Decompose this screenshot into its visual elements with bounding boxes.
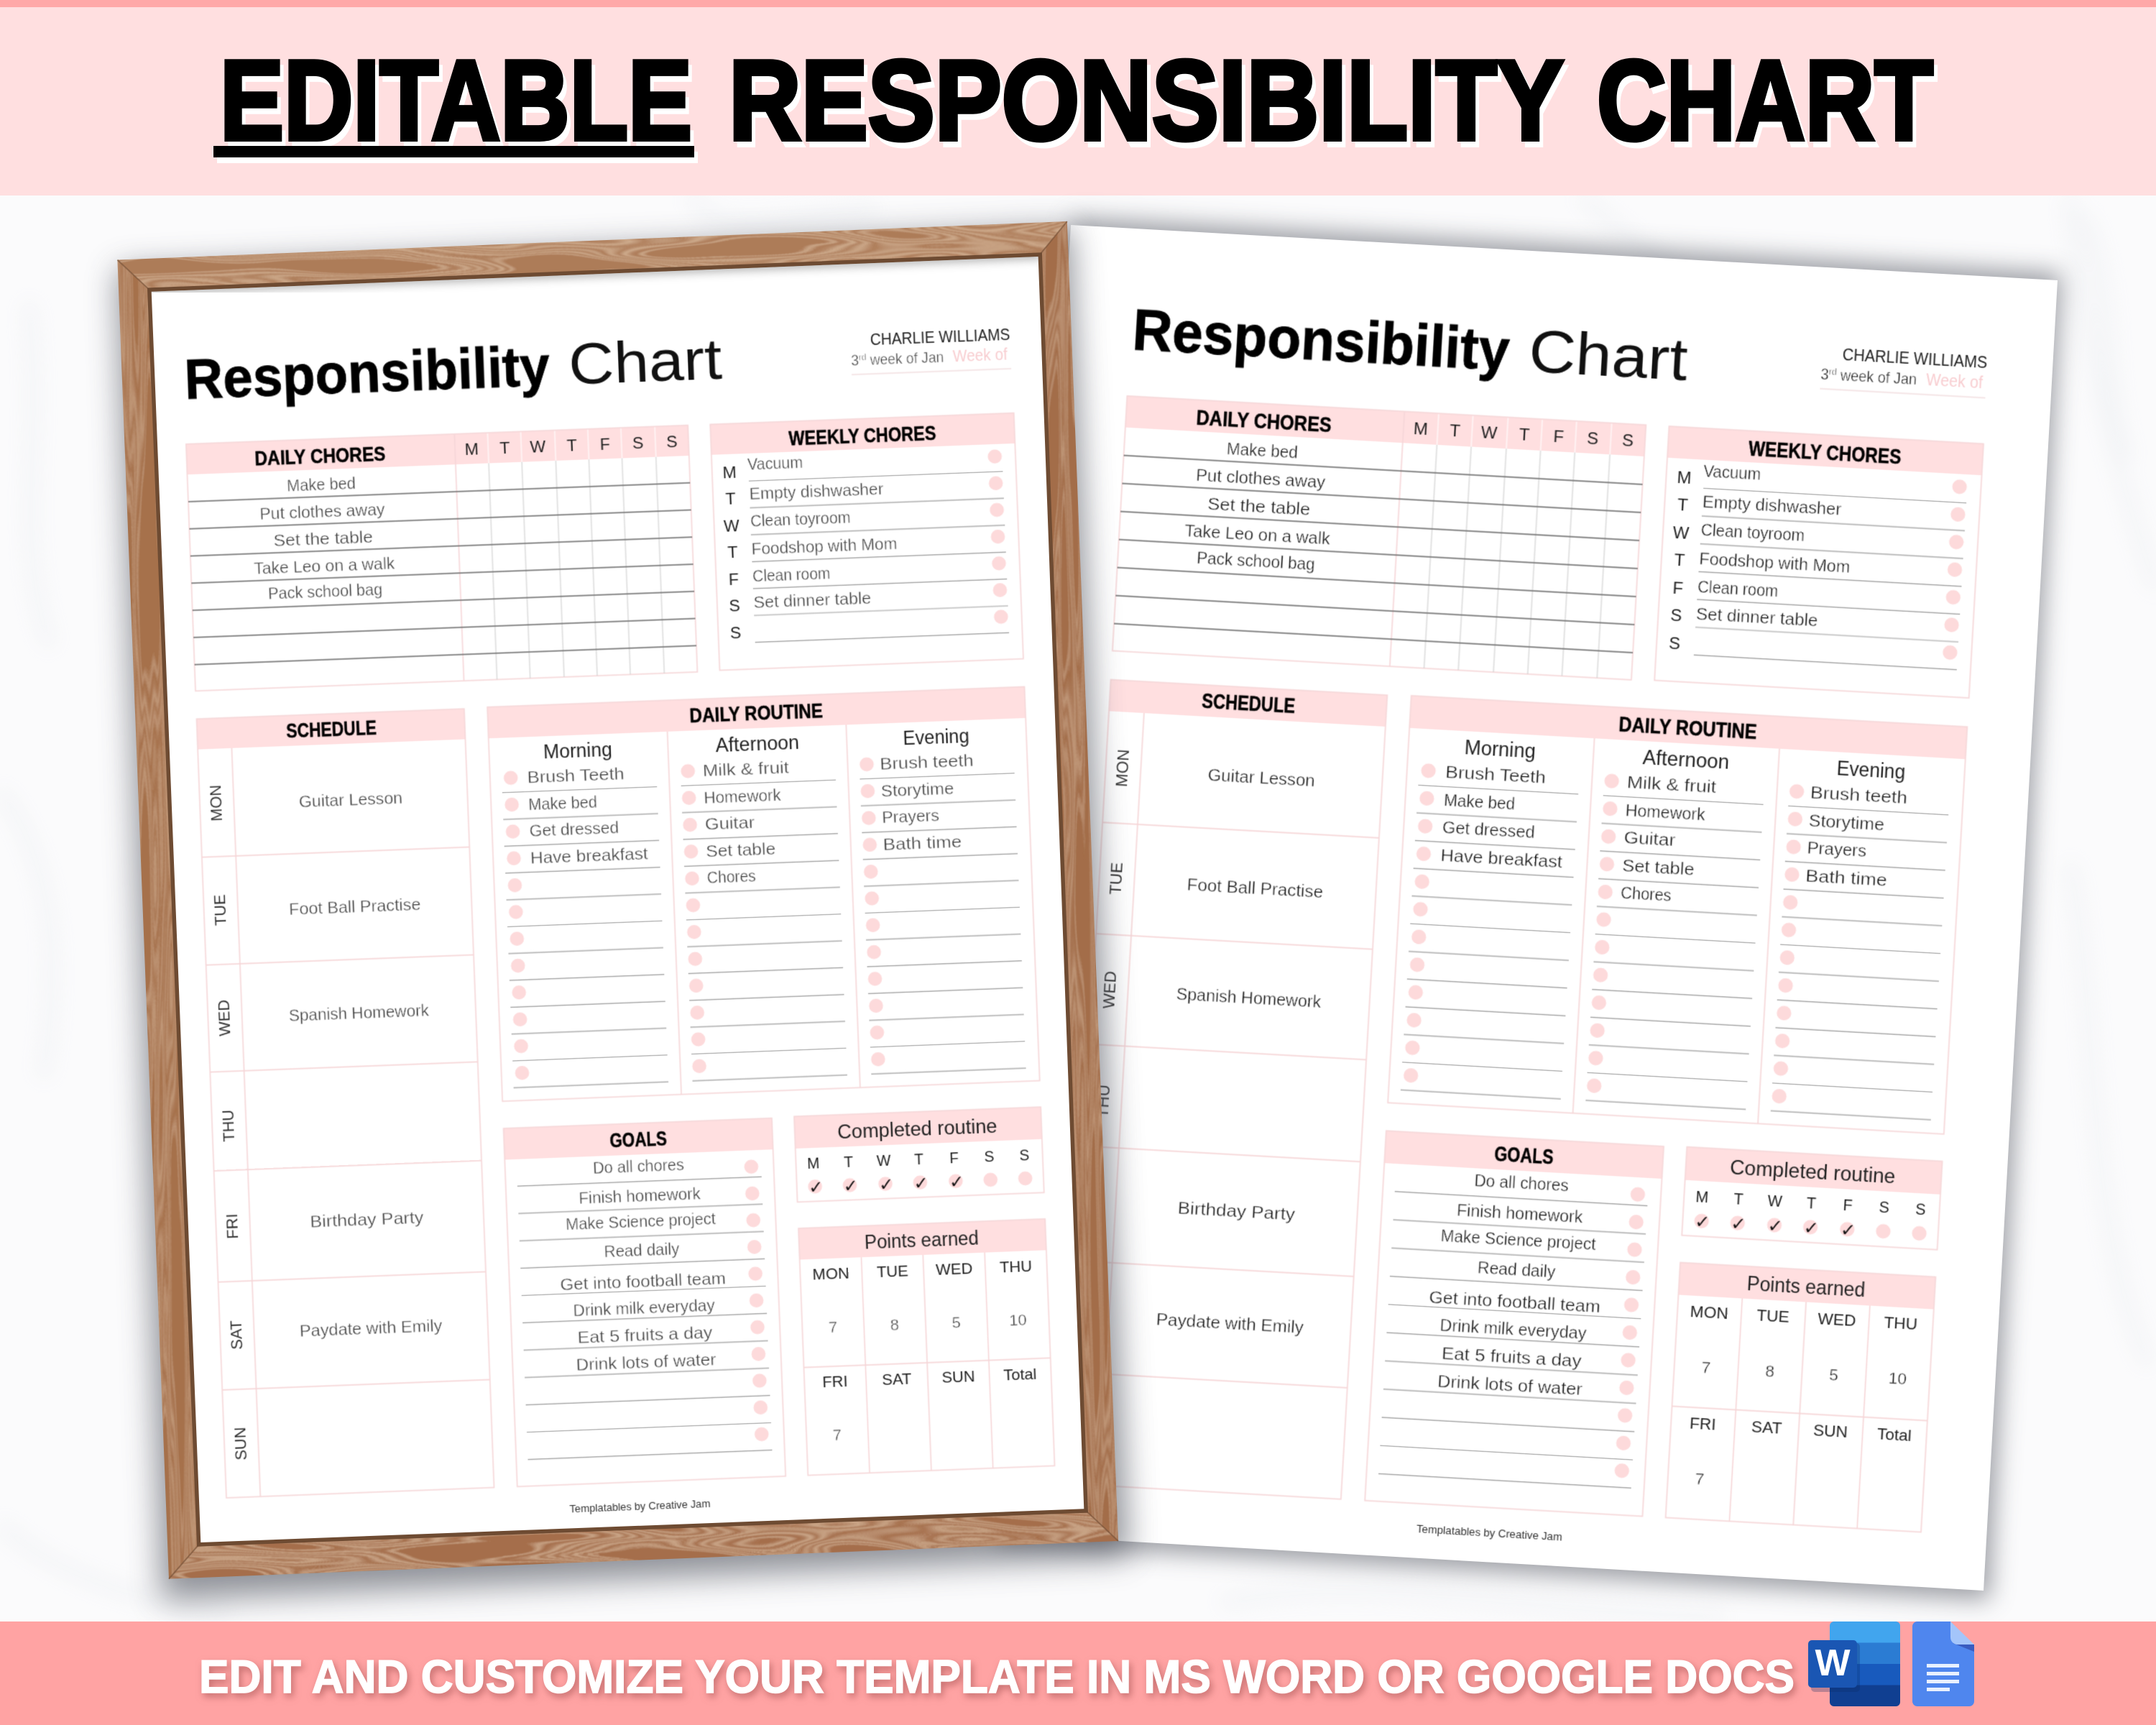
panel: schedule [197, 709, 494, 1498]
panel: goals [504, 1118, 786, 1486]
sheet title: Responsibility [183, 334, 551, 411]
completed routine day letters: S [1877, 1197, 1888, 1215]
panel: points earned [798, 1219, 1054, 1476]
weekly chores list: Vacuum [747, 453, 803, 474]
panel: daily chores [1112, 396, 1646, 680]
goals list: Get into football team [560, 1269, 726, 1294]
header band with title: CHART [1597, 37, 1933, 164]
weekly chores list: Vacuum [1702, 461, 1761, 484]
daily chores weekday headers: M [464, 440, 479, 459]
morning routine list: Brush Teeth [527, 765, 625, 788]
schedule day labels: TUE [1106, 862, 1126, 895]
evening routine list: Prayers [882, 806, 940, 828]
name and week: rd [1828, 366, 1836, 377]
completed routine day letters: F [1841, 1196, 1851, 1213]
panel: weekly chores [1654, 426, 1984, 698]
panel: schedule [1064, 680, 1387, 1499]
goals list: Finish homework [579, 1184, 701, 1208]
sheet title [183, 327, 723, 412]
afternoon routine list: Milk & fruit [703, 758, 790, 781]
afternoon routine list: Homework [704, 786, 782, 808]
daily chores list: Pack school bag [1196, 548, 1315, 574]
weekly chores list [1695, 461, 1856, 632]
schedule entries: Guitar Lesson [298, 788, 403, 811]
goals list: Eat 5 fruits a day [1440, 1343, 1581, 1370]
routine column headings: Evening [903, 725, 970, 750]
schedule day labels: WED [214, 999, 234, 1036]
completed routine check marks: ✓ [913, 1174, 929, 1194]
weekly day letters [722, 463, 744, 643]
panel: goals: GOALS [609, 1128, 668, 1151]
panel: schedule: SCHEDULE [1201, 690, 1296, 718]
schedule entries: Paydate with Emily [299, 1316, 443, 1340]
weekly chores list: Clean toyroom [750, 508, 852, 531]
schedule day labels: SAT [1081, 1301, 1100, 1332]
completed routine check marks: ✓ [949, 1172, 964, 1192]
name and week [1820, 343, 1988, 398]
afternoon routine list: Chores [707, 867, 757, 888]
schedule entries: Spanish Homework [1176, 983, 1322, 1011]
goals list: Eat 5 fruits a day [577, 1323, 714, 1348]
points earned day labels: MON [1688, 1302, 1728, 1322]
daily chores weekday headers: T [1449, 421, 1460, 441]
completed routine check marks: ✓ [879, 1174, 894, 1195]
evening routine list: Brush teeth [1809, 782, 1907, 807]
points earned values [1695, 1358, 1907, 1499]
name and week: 3 [1820, 366, 1830, 383]
afternoon routine list: Set table [1621, 855, 1694, 879]
weekly day letters: W [1672, 523, 1690, 543]
completed routine day letters: M [1694, 1187, 1708, 1205]
morning routine list: Get dressed [1441, 817, 1535, 842]
completed routine check marks: ✓ [1729, 1212, 1745, 1233]
points earned values: 10 [1009, 1311, 1028, 1330]
points earned day labels [812, 1257, 1037, 1392]
goals list: Do all chores [593, 1155, 684, 1178]
goals list: Drink milk everyday [573, 1296, 716, 1320]
routine column headings: Afternoon [715, 731, 800, 757]
evening routine list: Brush teeth [880, 752, 975, 774]
completed routine check marks: ✓ [1693, 1210, 1709, 1232]
panel: schedule: SCHEDULE [286, 717, 377, 742]
afternoon routine list [1620, 772, 1717, 908]
weekly day letters: T [725, 489, 737, 509]
name and week: week of Jan [1835, 367, 1916, 388]
points earned day labels: Total [1003, 1365, 1037, 1384]
daily chores weekday headers [464, 432, 678, 459]
icon: microsoft word: W [1815, 1642, 1851, 1684]
weekly day letters: F [729, 570, 740, 589]
afternoon routine list: Set table [706, 840, 776, 861]
panel: daily routine: DAILY ROUTINE [689, 700, 824, 727]
schedule day labels: SUN [1074, 1411, 1094, 1446]
points earned day labels: SAT [1749, 1417, 1781, 1436]
daily chores list: Set the table [273, 528, 374, 551]
schedule day labels: MON [206, 784, 226, 822]
points earned values [828, 1311, 1031, 1444]
completed routine day letters: S [1020, 1148, 1030, 1164]
sheet title: Chart [1526, 318, 1689, 393]
weekly day letters: F [1671, 578, 1683, 598]
schedule day labels: THU [1093, 1084, 1113, 1118]
evening routine list: Bath time [883, 832, 962, 855]
daily chores weekday headers: S [632, 433, 644, 453]
daily chores list [1182, 436, 1336, 575]
schedule entries [279, 788, 443, 1341]
name and week: CHARLIE WILLIAMS [1841, 344, 1986, 372]
daily chores weekday headers: T [1518, 425, 1529, 445]
weekly day letters [1666, 468, 1693, 654]
goals list: Drink milk everyday [1439, 1315, 1586, 1343]
weekly day letters: S [729, 597, 741, 616]
schedule entries [1156, 764, 1336, 1338]
evening routine list [1805, 783, 1908, 891]
footer call to action text: EDIT AND CUSTOMIZE YOUR TEMPLATE IN MS WORD OR GOOGLE DOCS [199, 1650, 1795, 1703]
goals list: Make Science project [566, 1209, 717, 1234]
schedule day labels: FRI [223, 1213, 241, 1238]
weekly day letters: S [730, 623, 742, 643]
panel: daily routine: DAILY ROUTINE [1618, 713, 1756, 743]
schedule entries: Paydate with Emily [1155, 1309, 1304, 1337]
points earned day labels [1683, 1302, 1918, 1445]
left sheet chart content [183, 325, 1056, 1515]
schedule day labels: SAT [226, 1320, 246, 1349]
daily chores weekday headers: S [666, 432, 678, 451]
daily chores list: Put clothes away [259, 500, 386, 524]
footer credit: Templatables by Creative Jam [1415, 1522, 1562, 1542]
weekly day letters: S [1667, 633, 1680, 653]
daily chores list: Make bed [287, 474, 356, 496]
daily chores weekday headers: S [1586, 428, 1598, 448]
daily chores weekday headers: S [1621, 431, 1634, 451]
panel: daily chores: DAILY CHORES [254, 443, 386, 470]
weekly chores list: Set dinner table [754, 589, 872, 612]
morning routine list: Get dressed [529, 819, 619, 841]
daily chores weekday headers: F [600, 435, 611, 454]
afternoon routine list: Guitar [705, 814, 755, 834]
schedule day labels: FRI [1087, 1191, 1107, 1218]
daily chores weekday headers: T [499, 438, 510, 457]
schedule day labels [206, 785, 250, 1460]
daily chores list: Set the table [1207, 494, 1311, 520]
points earned day labels: WED [936, 1260, 973, 1279]
weekly day letters: T [727, 543, 738, 562]
points earned day labels: TUE [877, 1262, 909, 1281]
completed routine day letters: T [1805, 1194, 1815, 1211]
daily chores list: Make bed [1226, 438, 1298, 463]
evening routine list: Bath time [1804, 865, 1886, 890]
footer credit: Templatables by Creative Jam [569, 1498, 711, 1515]
daily chores weekday headers: M [1413, 419, 1428, 439]
daily chores list: Pack school bag [268, 580, 383, 604]
evening routine list: Storytime [1807, 809, 1884, 834]
weekly day letters: S [1669, 606, 1682, 626]
weekly day letters: T [1676, 495, 1687, 515]
points earned values: 7 [1700, 1358, 1710, 1376]
panel: points earned: Points earned [1745, 1271, 1864, 1301]
header band with title: RESPONSIBILITY [729, 37, 1564, 164]
completed routine check marks [1694, 1211, 1856, 1241]
afternoon routine list [702, 758, 793, 888]
schedule entries: Birthday Party [1176, 1197, 1296, 1224]
schedule day labels: WED [1100, 970, 1120, 1009]
panel: completed routine [1682, 1147, 1943, 1250]
points earned day labels: THU [1881, 1312, 1916, 1332]
panel: goals: GOALS [1493, 1142, 1553, 1169]
sheet title: Chart [568, 327, 724, 397]
weekly day letters: W [724, 517, 740, 535]
morning routine list: Make bed [528, 792, 598, 814]
completed routine check marks: ✓ [1766, 1214, 1782, 1236]
completed routine day letters: T [1732, 1190, 1742, 1208]
header band with title: EDITABLE [220, 37, 692, 164]
points earned values: 10 [1886, 1368, 1905, 1386]
panel: weekly chores: WEEKLY CHORES [1747, 437, 1901, 469]
points earned day labels: FRI [1688, 1413, 1715, 1432]
points earned day labels: THU [1000, 1258, 1033, 1276]
schedule day labels: MON [1112, 749, 1133, 787]
daily chores list [250, 472, 397, 604]
daily chores weekday headers: T [566, 436, 577, 455]
panel: daily routine [1388, 696, 1967, 1134]
routine column headings [543, 724, 969, 763]
daily chores list: Take Leo on a walk [1184, 520, 1331, 548]
weekly chores list: Empty dishwasher [1701, 492, 1841, 519]
icon: google docs [1912, 1622, 1974, 1706]
schedule day labels: THU [218, 1109, 238, 1142]
afternoon routine list: Chores [1619, 883, 1671, 906]
morning routine list [527, 763, 648, 868]
points earned day labels: MON [812, 1264, 849, 1284]
routine column headings: Evening [1835, 757, 1904, 783]
morning routine list: Have breakfast [530, 845, 649, 868]
goals list: Read daily [604, 1239, 681, 1261]
panel: points earned [1666, 1263, 1935, 1532]
goals list: Finish homework [1455, 1200, 1583, 1226]
schedule day labels: SUN [231, 1426, 250, 1460]
panel: completed routine: Completed routine [837, 1116, 998, 1144]
weekly chores list: Clean room [752, 564, 831, 586]
points earned day labels: TUE [1755, 1305, 1788, 1325]
points earned values: 7 [1693, 1468, 1703, 1487]
schedule day labels: TUE [211, 894, 229, 926]
routine column headings [1464, 736, 1906, 784]
goals list: Get into football team [1428, 1287, 1600, 1316]
completed routine check marks [808, 1172, 964, 1197]
completed routine check marks: ✓ [843, 1176, 859, 1197]
points earned values: 5 [952, 1314, 962, 1332]
points earned values: 7 [829, 1318, 838, 1336]
panel: points earned: Points earned [865, 1227, 980, 1254]
completed routine day letters [1695, 1188, 1926, 1218]
evening routine list: Prayers [1805, 837, 1866, 860]
completed routine day letters: T [914, 1151, 924, 1169]
schedule entries: Spanish Homework [288, 1000, 430, 1025]
morning routine list: Brush Teeth [1445, 762, 1546, 787]
goals list: Do all chores [1473, 1169, 1568, 1195]
weekly chores list: Foodshop with Mom [752, 535, 898, 559]
sheet title [1131, 295, 1690, 393]
morning routine list: Make bed [1443, 789, 1515, 814]
daily chores weekday headers: F [1552, 427, 1564, 446]
panel: daily chores: DAILY CHORES [1196, 407, 1332, 437]
routine column headings: Morning [1463, 736, 1536, 763]
weekly chores list: Foodshop with Mom [1698, 548, 1850, 576]
completed routine check marks: ✓ [808, 1177, 824, 1198]
afternoon routine list: Homework [1624, 799, 1705, 824]
completed routine day letters: T [844, 1154, 854, 1171]
panel: completed routine: Completed routine [1728, 1155, 1894, 1187]
name and week: Week of [954, 345, 1009, 366]
points earned day labels: SUN [1811, 1420, 1846, 1440]
daily chores weekday headers: W [1480, 423, 1498, 443]
afternoon routine list: Guitar [1623, 827, 1675, 850]
schedule entries: Guitar Lesson [1207, 765, 1315, 791]
daily chores weekday headers [1413, 419, 1634, 451]
name and week: 3 [851, 352, 860, 369]
right sheet chart content [1074, 298, 1988, 1542]
points earned day labels: SAT [882, 1370, 912, 1389]
panel: goals [1365, 1131, 1664, 1517]
completed routine day letters: W [1766, 1192, 1782, 1210]
weekly day letters: M [1676, 468, 1691, 488]
schedule entries: Foot Ball Practise [288, 895, 421, 919]
panel: weekly chores: WEEKLY CHORES [789, 423, 937, 450]
goals list: Make Science project [1439, 1225, 1595, 1254]
name and week [850, 325, 1011, 374]
panel: daily chores [186, 426, 697, 691]
evening routine list [880, 751, 977, 855]
schedule entries: Birthday Party [310, 1208, 425, 1231]
routine column headings: Afternoon [1641, 746, 1729, 773]
points earned day labels: Total [1875, 1423, 1910, 1443]
header band with title [0, 0, 2156, 196]
evening routine list: Storytime [881, 779, 955, 801]
weekly chores list: Empty dishwasher [750, 480, 885, 504]
icon: microsoft word [1808, 1622, 1900, 1706]
points earned values: 7 [832, 1426, 842, 1444]
points earned day labels: WED [1816, 1309, 1855, 1328]
sheet title: Responsibility [1131, 298, 1511, 383]
goals list: Drink lots of water [576, 1350, 717, 1374]
name and week: rd [860, 352, 867, 363]
goals list [556, 1154, 729, 1375]
weekly chores list: Set dinner table [1695, 604, 1818, 630]
morning routine list: Have breakfast [1439, 845, 1562, 872]
name and week: Week of [1925, 370, 1982, 392]
weekly chores list: Clean toyroom [1700, 520, 1804, 546]
goals list: Read daily [1476, 1256, 1555, 1281]
afternoon routine list: Milk & fruit [1626, 772, 1716, 797]
completed routine day letters: S [1913, 1200, 1925, 1218]
completed routine day letters: S [985, 1149, 995, 1166]
goals list [1424, 1168, 1608, 1400]
completed routine day letters: M [807, 1156, 820, 1172]
panel: weekly chores [710, 413, 1023, 671]
routine column headings: Morning [543, 738, 612, 763]
points earned values: 8 [890, 1316, 900, 1334]
completed routine check marks: ✓ [1838, 1218, 1855, 1240]
points earned values: 8 [1764, 1361, 1774, 1379]
daily chores list: Put clothes away [1195, 465, 1326, 492]
weekly day letters: T [1673, 551, 1685, 571]
points earned day labels: FRI [822, 1372, 848, 1391]
points earned values: 5 [1827, 1365, 1837, 1383]
points earned day labels: SUN [941, 1368, 975, 1386]
panel: completed routine [794, 1107, 1044, 1202]
daily chores list: Take Leo on a walk [254, 554, 396, 579]
weekly chores list [747, 449, 900, 612]
weekly chores list: Clean room [1696, 576, 1778, 601]
name and week: week of Jan [867, 349, 945, 369]
goals list: Drink lots of water [1436, 1371, 1582, 1399]
completed routine day letters [807, 1147, 1030, 1172]
name and week: CHARLIE WILLIAMS [870, 325, 1011, 350]
completed routine check marks: ✓ [1802, 1216, 1818, 1238]
daily chores weekday headers: W [530, 437, 546, 456]
completed routine day letters: F [949, 1151, 959, 1167]
schedule entries: Foot Ball Practise [1186, 874, 1323, 902]
completed routine day letters: W [877, 1153, 892, 1170]
morning routine list [1440, 762, 1568, 872]
wooden picture frame with left sheet paper [96, 208, 1148, 1620]
schedule day labels [1074, 749, 1133, 1447]
weekly day letters: M [723, 463, 737, 482]
panel: daily routine [487, 686, 1040, 1101]
